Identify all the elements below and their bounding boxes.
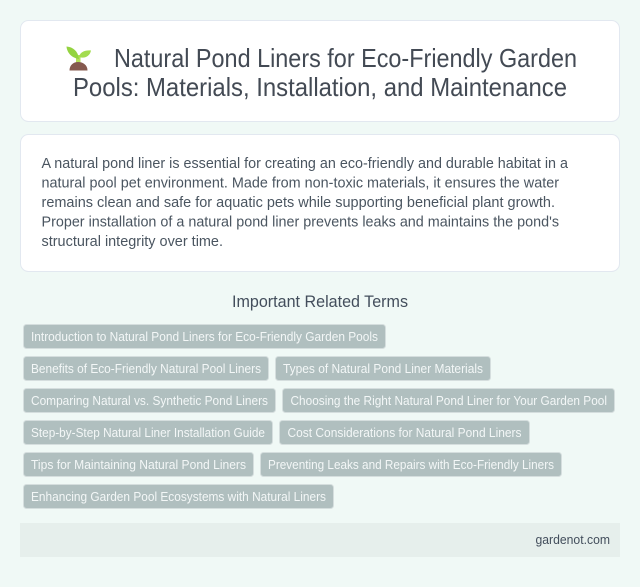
panel: description	[20, 134, 620, 272]
tag	[280, 420, 530, 444]
tag: Types of Natural Pond Liner Materials	[283, 361, 483, 376]
footer	[20, 523, 620, 557]
title: Pools: Materials, Installation, and Maintenance	[73, 72, 567, 102]
tag	[24, 356, 268, 380]
tag: Tips for Maintaining Natural Pond Liners	[31, 457, 246, 472]
panel: title card	[20, 20, 620, 122]
tag: Choosing the Right Natural Pond Liner for Your Garden Pool	[290, 393, 607, 408]
text block: description: A natural pond liner is essential for creating an eco-friendly and durable habitat in a	[42, 155, 569, 172]
text block: description: Proper installation of a natural pond liner prevents leaks and maintains the pond's	[42, 214, 559, 230]
footer text: site name: gardenot.com	[536, 532, 610, 547]
text block: description: remains clean and safe for aquatic pets while supporting beneficial plant growth.	[42, 194, 555, 211]
tag: Introduction to Natural Pond Liners for Eco-Friendly Garden Pools	[31, 329, 378, 344]
tag: Benefits of Eco-Friendly Natural Pool Liners	[31, 361, 261, 376]
tag	[24, 420, 272, 444]
tag	[282, 388, 614, 412]
tag: Comparing Natural vs. Synthetic Pond Liners	[31, 393, 268, 408]
panel: related term tags	[24, 324, 614, 508]
tag	[24, 484, 334, 508]
tag	[24, 324, 386, 348]
tag: Enhancing Garden Pool Ecosystems with Natural Liners	[31, 489, 326, 504]
title: Natural Pond Liners for Eco-Friendly Garden	[114, 43, 577, 73]
text block: description: structural integrity over time.	[42, 233, 223, 250]
tag: Step-by-Step Natural Liner Installation Guide	[31, 425, 265, 440]
text block: description	[42, 155, 569, 250]
tag: Preventing Leaks and Repairs with Eco-Friendly Liners	[268, 457, 554, 472]
tag	[276, 356, 490, 380]
tag	[260, 452, 562, 476]
title	[73, 43, 577, 102]
text block: description: natural pool pet environment. Made from non-toxic materials, it ensures the water	[42, 174, 559, 192]
tag: Cost Considerations for Natural Pond Liners	[288, 425, 522, 440]
tag	[24, 452, 254, 476]
heading: related terms: Important Related Terms	[232, 293, 408, 311]
icon: seedling	[66, 46, 91, 70]
tag	[24, 388, 276, 412]
